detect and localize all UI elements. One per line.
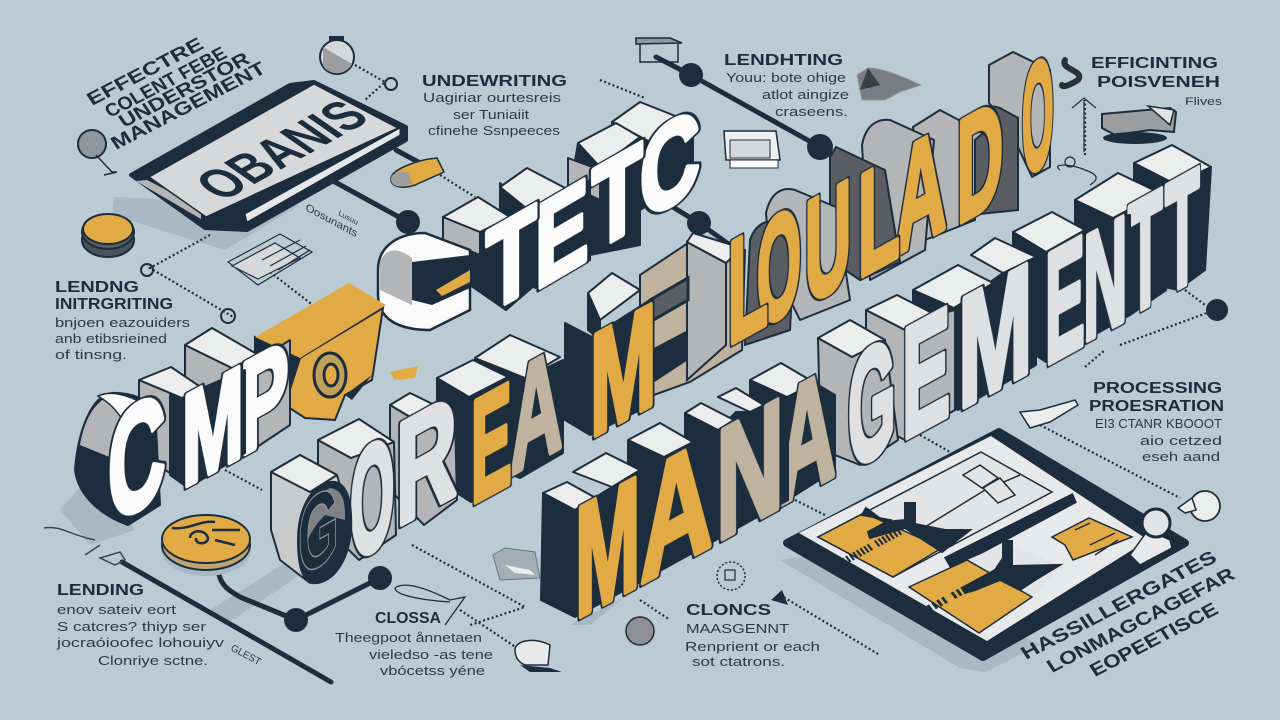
letter T (1134, 135, 1211, 329)
text block: closs: CLOSSA (375, 610, 441, 627)
connector lines (122, 57, 1228, 682)
icon: grey rock (493, 548, 540, 580)
text block: underwriting: UNDEWRITING (422, 73, 567, 90)
letter E: E (471, 352, 512, 536)
icon: bell (771, 590, 788, 605)
letter T: T (486, 178, 536, 339)
letter M (913, 228, 1036, 444)
block C cylinder (378, 233, 470, 330)
isometric heading: top left: MANAGEMENT (107, 58, 271, 154)
letter O: O (757, 173, 801, 360)
text block: processing: PROCESSING (1093, 380, 1222, 397)
text block: underwriting: ser Tuniaiit (453, 107, 529, 122)
letter M: M (590, 270, 656, 469)
icon: up arrow (1058, 98, 1096, 185)
letter M: M (182, 338, 244, 516)
letter A: A (778, 334, 836, 540)
text block: closs (335, 610, 493, 678)
small rotated label: Oosunants (304, 202, 359, 240)
text block: lending: LENDING (57, 582, 144, 599)
letter G (818, 302, 898, 504)
letter A (750, 334, 836, 540)
panel: isometric tablet (780, 432, 1185, 672)
small rotated label: Lusuu (337, 209, 359, 227)
text block: lending intrgriting: bnjoen eazouiders (55, 315, 191, 330)
letter E (866, 272, 955, 474)
text block: processing (1089, 380, 1224, 464)
isometric heading: top left: UNDERSTOR (115, 49, 254, 132)
letter C: C (108, 359, 165, 558)
isometric heading: bottom right: LONMAGCAGEFAR (1043, 564, 1239, 677)
chart card one (818, 452, 1052, 577)
icon: racket (78, 130, 117, 175)
isometric heading: bottom right: EOPEETISCE (1086, 599, 1222, 681)
text block: clonces: CLONCS (686, 602, 771, 619)
icon: printer card (724, 131, 780, 168)
letter A: A (510, 316, 562, 507)
text block: lendhting (724, 52, 849, 119)
text block: lendhting: atlot aingize (762, 87, 849, 102)
icon: grey shoe (1102, 106, 1176, 144)
letter N: N (716, 362, 784, 576)
letter A: A (640, 404, 713, 618)
isometric heading: top left: COLENT FEBE (101, 44, 231, 122)
text block: efficinting: EFFICINTING (1091, 55, 1218, 72)
letter G face (298, 482, 351, 583)
letter N (685, 362, 788, 576)
letter E (1013, 200, 1085, 399)
letter T: T (1165, 135, 1200, 329)
icon: top globe (320, 36, 354, 74)
text block: processing: PROESRATION (1089, 398, 1224, 415)
text block: lending: GLEST (229, 643, 263, 668)
text block: lending: Clonriye sctne. (98, 653, 208, 668)
icon: grey disc (626, 617, 654, 645)
tablet knob (1142, 509, 1170, 537)
letter L: L (858, 124, 900, 309)
text block: closs: Theegpoot ånnetaen (335, 630, 482, 645)
letter R: R (396, 364, 457, 559)
text block: processing: EI3 CTANR KBOOOT (1095, 416, 1222, 431)
text block: underwriting: Uagiriar ourtesreis (423, 90, 562, 105)
text block: clonces: Renprient or each (685, 639, 820, 654)
text block: underwriting: cfinehe Ssnpeeces (428, 123, 561, 138)
panel: isometric book (131, 82, 406, 230)
letter T (1075, 156, 1166, 350)
chart card one: IIIIIIII IIIIIII (840, 527, 905, 567)
icon: keyboard (228, 234, 312, 285)
gold tag (1052, 518, 1132, 560)
isometric heading: bottom right: HASSILLERGATES (1017, 547, 1221, 664)
block word: MANAGEMENT (541, 135, 1211, 653)
letter G: G (848, 302, 896, 504)
letter N: N (1083, 182, 1127, 374)
text block: lending: S catcres? thiyp ser (57, 619, 207, 634)
letter D: D (957, 68, 1003, 256)
text block: lending intrgriting: INITRGRITING (55, 296, 173, 313)
text block: efficinting: Flives (1185, 96, 1223, 108)
icon: squiggle (1062, 60, 1079, 86)
text block: closs: vbócetss yéne (380, 663, 485, 678)
text block: lending intrgriting (55, 279, 191, 362)
icon: coin stack (82, 214, 134, 257)
letter M: M (958, 228, 1033, 444)
gold box (255, 283, 418, 420)
text block: closs: vieledso -as tene (369, 647, 493, 662)
letter O: O (350, 401, 394, 594)
block word: LOULADON (728, 23, 1054, 376)
text block: lending intrgriting: anb etibsrieined (55, 331, 167, 346)
letter A: A (895, 96, 946, 286)
letter T: T (592, 116, 642, 277)
ground shadows (60, 197, 1170, 625)
text block: clonces: sot ctatrons. (692, 654, 785, 669)
icon: grey stone (857, 68, 921, 100)
text block: lending: enov sateiv eort (57, 602, 176, 617)
letter M (541, 442, 640, 653)
icon: outline bow (395, 585, 465, 625)
icon: helmet (515, 640, 562, 672)
letter P: P (240, 312, 289, 485)
letter G: G (298, 462, 339, 601)
block word: CTETC (378, 81, 700, 339)
book title: OBANIS (182, 92, 382, 209)
chart card two: IIIII IIIIII (920, 577, 985, 617)
letter L: L (728, 193, 768, 376)
text block: lendhting: LENDHTING (724, 52, 843, 69)
icon: wrench (1020, 400, 1078, 428)
icon: top machine (636, 38, 682, 62)
letter M: M (575, 442, 640, 653)
letter E: E (535, 152, 589, 316)
text block: lendhting: Youu: bote ohige (726, 70, 846, 85)
block word: GOREAM (271, 270, 656, 601)
text block: clonces: MAASGENNT (686, 621, 789, 636)
letter E: E (902, 272, 950, 474)
letter U: U (805, 149, 851, 337)
text block: lending intrgriting: LENDNG (55, 279, 139, 296)
icon: sketch hand (44, 527, 125, 565)
isometric heading: top left (83, 34, 271, 154)
text block: processing: eseh aand (1142, 449, 1220, 464)
tan back block (640, 233, 745, 400)
letter T: T (1128, 156, 1163, 350)
block word: CMP and gold box (75, 283, 418, 558)
icon: white bulb (1178, 491, 1220, 521)
letter C: C (640, 81, 700, 247)
icon: small gear (717, 562, 745, 590)
text block: processing: aio cetzed (1140, 433, 1222, 448)
chart card two (909, 541, 1064, 633)
text block: lendhting: craseens. (775, 104, 848, 119)
divider bar (946, 495, 1075, 568)
letter O: O (1022, 23, 1054, 208)
isometric heading: top left: EFFECTRE (83, 34, 208, 110)
letter E: E (1045, 200, 1085, 399)
text block: efficinting: POISVENEH (1097, 74, 1220, 91)
text block: lending (56, 582, 263, 668)
icon: gold capsule (391, 158, 444, 187)
text block: lending: jocraóioofec lohouiyv (56, 635, 225, 650)
text block: underwriting (422, 73, 567, 138)
text block: efficinting (1091, 55, 1223, 108)
text block: clonces (685, 602, 820, 669)
text block: lending intrgriting: of tinsng. (55, 347, 127, 362)
isometric heading: bottom right (1017, 547, 1239, 681)
icon: gold swirl coin (161, 515, 251, 576)
